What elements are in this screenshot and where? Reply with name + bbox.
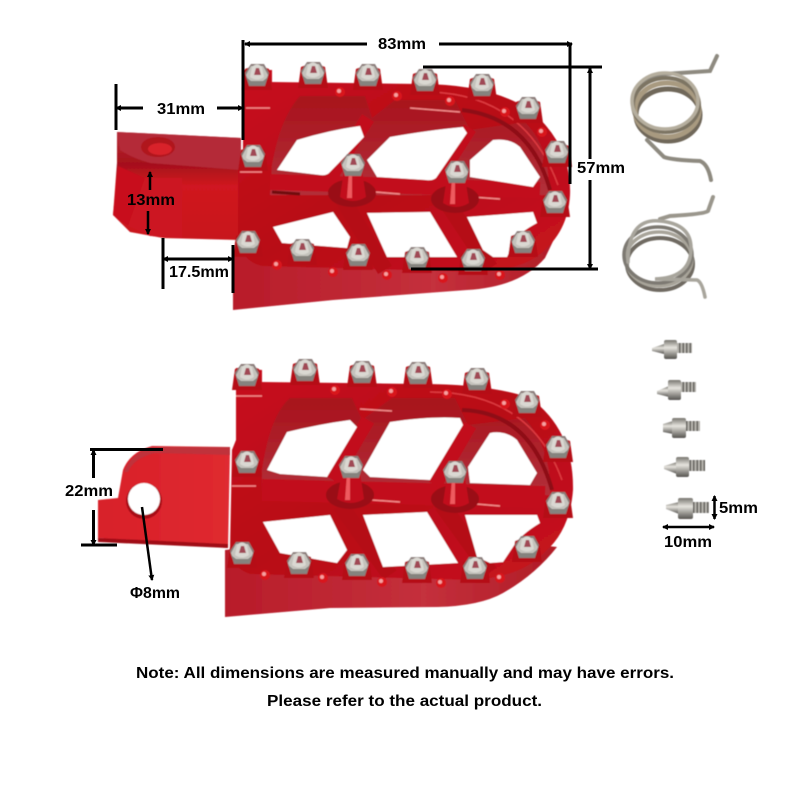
dimension: 57mm height: 57mm [577, 160, 625, 177]
top peg mounting arm [113, 132, 241, 240]
top peg stud tabs [233, 64, 572, 275]
dimension: 8mm hole diameter: Φ8mm [130, 585, 180, 602]
top foot peg [113, 62, 572, 310]
icon: upper torsion spring [632, 56, 717, 180]
top peg studs [236, 62, 569, 271]
dimension: 83mm width: 83mm [378, 36, 426, 53]
bottom peg stud tabs [227, 362, 573, 583]
icon: spare stud 1 [652, 340, 692, 359]
note line 1: Note: All dimensions are measured manually and may have errors. [136, 665, 674, 682]
icon: spare stud 3 [663, 418, 700, 438]
bottom peg openings [263, 418, 540, 567]
bottom peg highlights [232, 392, 562, 506]
dimension: 17.5mm: 17.5mm [169, 264, 229, 281]
top peg inner recess wall [270, 96, 549, 195]
dimension: 17.5mm [163, 238, 233, 293]
top peg frame [238, 70, 570, 272]
top peg highlights [240, 92, 558, 199]
dimension: 5mm stud height: 5mm [719, 500, 758, 517]
bottom peg ribs [262, 420, 545, 575]
top peg ribs [270, 118, 540, 270]
icon: spare stud 2 [657, 380, 696, 400]
dimension: 22mm [65, 450, 163, 545]
dimension: 10mm stud length [663, 527, 714, 551]
bottom peg studs [230, 359, 570, 579]
dimension: 13mm: 13mm [127, 192, 175, 209]
bottom peg center bosses [326, 472, 479, 513]
bottom peg base plate [225, 530, 557, 617]
dimension: 5mm stud height [714, 496, 758, 519]
bottom peg inner recess wall [262, 398, 550, 495]
bottom peg mounting arm [98, 446, 230, 548]
dimension: 31mm arm length [116, 84, 243, 130]
top peg red edge bumps [272, 87, 547, 283]
bottom foot peg [98, 359, 573, 617]
top peg openings [273, 126, 540, 257]
dimension: 22mm: 22mm [65, 483, 113, 500]
bottom peg red edge bumps [260, 385, 550, 588]
dimension: 13mm [127, 172, 175, 234]
dimension: 10mm stud length: 10mm [664, 534, 712, 551]
dimension: 31mm arm length: 31mm [157, 101, 205, 118]
bottom peg frame [230, 368, 573, 580]
icon: spare stud 5 [666, 498, 709, 519]
icon: spare stud 4 [664, 457, 705, 477]
dimension: 8mm hole diameter [130, 507, 180, 602]
top peg base plate [233, 210, 568, 310]
icon: lower torsion spring [624, 197, 713, 297]
top peg center bosses [328, 170, 479, 213]
note line 2: Please refer to the actual product. [267, 693, 542, 710]
